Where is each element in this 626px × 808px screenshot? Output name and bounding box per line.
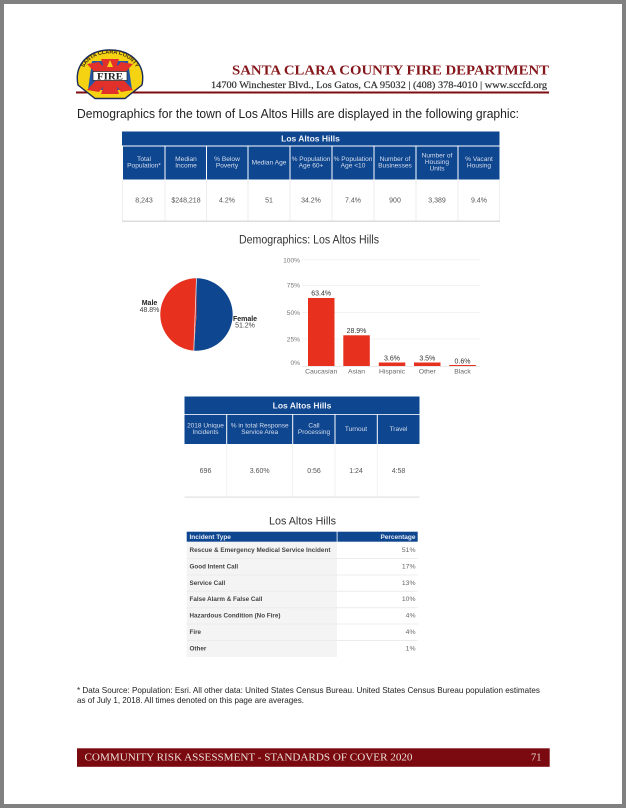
table values row: 0:56: [307, 468, 321, 475]
table header row: Total: [137, 156, 151, 163]
axis labels: 50%: [287, 310, 300, 317]
axis labels: 100%: [283, 258, 300, 264]
table values row: 51: [265, 198, 273, 204]
pie chart: gender: [140, 278, 257, 351]
table header row: 2018 Unique: [187, 422, 224, 430]
pie slice: female: [194, 278, 233, 351]
table header row: Incident Type: [190, 534, 231, 541]
table values row: 34.2%: [301, 198, 321, 204]
table rows: Fire: [190, 629, 202, 636]
table header row: Housing: [467, 162, 491, 170]
table header row: Median: [175, 156, 197, 163]
table rows: Service Call: [190, 580, 225, 587]
table rows: 4%: [406, 613, 416, 620]
footer title: COMMUNITY RISK ASSESSMENT - STANDARDS OF COVER 2020: [84, 752, 412, 764]
table rows: 51%: [402, 547, 416, 554]
table values row: [200, 468, 405, 475]
table rows: 4%: [406, 629, 416, 636]
table header row: Age <10: [341, 162, 366, 170]
pie label: female: [233, 316, 257, 330]
pie label: female: Female: [233, 316, 257, 323]
table header row: Turnout: [345, 426, 367, 433]
bars: [308, 298, 476, 366]
table rows: [190, 547, 416, 652]
icon: fire department badge: SANTA CLARA COUNTY: [81, 50, 140, 67]
table values row: 900: [389, 198, 401, 204]
table header row: Processing: [298, 429, 330, 436]
table values row: 4.2%: [219, 198, 235, 204]
table rows: Other: [190, 646, 207, 652]
table rows: False Alarm & False Call: [190, 596, 263, 603]
organisation name: SANTA CLARA COUNTY FIRE DEPARTMENT: [232, 62, 549, 78]
table header row: % Population: [334, 156, 373, 163]
table title: Los Altos Hills: [273, 400, 332, 410]
page number: 71: [531, 752, 542, 764]
axis labels: 25%: [287, 336, 300, 344]
table header row: Number of: [422, 152, 453, 160]
table values row: 3,389: [428, 198, 446, 204]
table values row: 8,243: [135, 198, 153, 204]
table values row: 9.4%: [471, 198, 487, 204]
table rows: 1%: [406, 646, 416, 652]
pie slice: male: [160, 278, 196, 351]
table rows: 13%: [402, 580, 416, 587]
table header row: [187, 532, 418, 542]
incident table heading: Los Altos Hills: [269, 516, 336, 528]
table header row: % in total Response: [231, 422, 289, 430]
table header row: Percentage: [380, 534, 416, 541]
pie label: female: 51.2%: [235, 322, 255, 330]
table header row: Income: [175, 162, 197, 170]
table title: Los Altos Hills: [281, 134, 340, 144]
footer bar: [77, 748, 550, 767]
intro sentence: Demographics for the town of Los Altos Hills are displayed in the following graphic:: [77, 107, 519, 121]
table values row: [135, 198, 487, 204]
icon: fire department badge: FIRE: [97, 71, 123, 81]
table header row: Businesses: [378, 162, 413, 170]
footnote: as of July 1, 2018. All times denoted on this page are averages.: [77, 695, 304, 705]
table header row: Poverty: [216, 162, 239, 170]
pie label: male: Male: [142, 300, 157, 307]
header: [76, 49, 549, 100]
table rows: Hazardous Condition (No Fire): [190, 613, 280, 620]
footnote: * Data Source: Population: Esri. All other data: United States Census Bureau. United States Census Bureau population estimates: [77, 685, 540, 695]
bar values: 63.4%: [311, 290, 331, 298]
bar categories: Other: [419, 368, 437, 376]
table rows: 10%: [402, 596, 416, 603]
axis labels: 75%: [287, 282, 300, 290]
footnote: [77, 685, 540, 705]
table header row: Travel: [390, 426, 408, 433]
table header row: Age 60+: [299, 162, 324, 170]
table header row: % Vacant: [465, 156, 493, 163]
header rule: [76, 92, 549, 94]
bar categories: Black: [454, 368, 471, 376]
bar values: 3.5%: [419, 356, 435, 362]
table header row: Population*: [127, 162, 161, 170]
bar chart: race and ethnicity: [283, 258, 480, 376]
table header row: Incidents: [192, 429, 219, 436]
table: incident types: [187, 532, 418, 657]
pie label: male: 48.8%: [140, 307, 159, 314]
axis labels: 0%: [290, 360, 300, 367]
pie label: male: [140, 300, 159, 314]
table header row: Units: [429, 166, 445, 172]
bar values: 3.6%: [384, 356, 400, 362]
bar categories: Asian: [348, 368, 365, 376]
bar values: [311, 290, 470, 366]
axis labels: [283, 258, 300, 367]
bar values: 0.6%: [455, 358, 470, 366]
table rows: Rescue & Emergency Medical Service Incident: [190, 547, 331, 554]
table header row: % Population: [292, 156, 331, 163]
bar categories: Hispanic: [379, 368, 406, 376]
table header row: Call: [308, 422, 320, 430]
table header row: % Below: [214, 156, 240, 163]
bar categories: Caucasian: [305, 368, 337, 376]
table values row: 1:24: [349, 468, 363, 475]
table values row: 4:58: [392, 468, 405, 475]
table header row: Median Age: [252, 160, 287, 166]
table header row: Service Area: [241, 429, 279, 436]
table: demographics: [122, 131, 500, 222]
bar categories: [305, 368, 471, 376]
address line: 14700 Winchester Blvd., Los Gatos, CA 95032 | (408) 378-4010 | www.sccfd.org: [211, 80, 547, 91]
icon: fire department badge: [76, 49, 144, 100]
table header row: Housing: [425, 159, 449, 166]
table values row: 3.60%: [250, 468, 270, 475]
chart title: Demographics: Los Altos Hills: [239, 234, 379, 246]
table header row: [123, 146, 500, 180]
table header row: [184, 415, 420, 444]
table header row: Number of: [380, 156, 411, 163]
table values row: $248,218: [171, 198, 201, 204]
table values row: 696: [200, 468, 211, 475]
table rows: 17%: [402, 564, 416, 570]
bar values: 28.9%: [347, 328, 366, 335]
table rows: Good Intent Call: [190, 564, 238, 570]
table values row: 7.4%: [345, 198, 361, 204]
table: response times: [184, 396, 420, 498]
